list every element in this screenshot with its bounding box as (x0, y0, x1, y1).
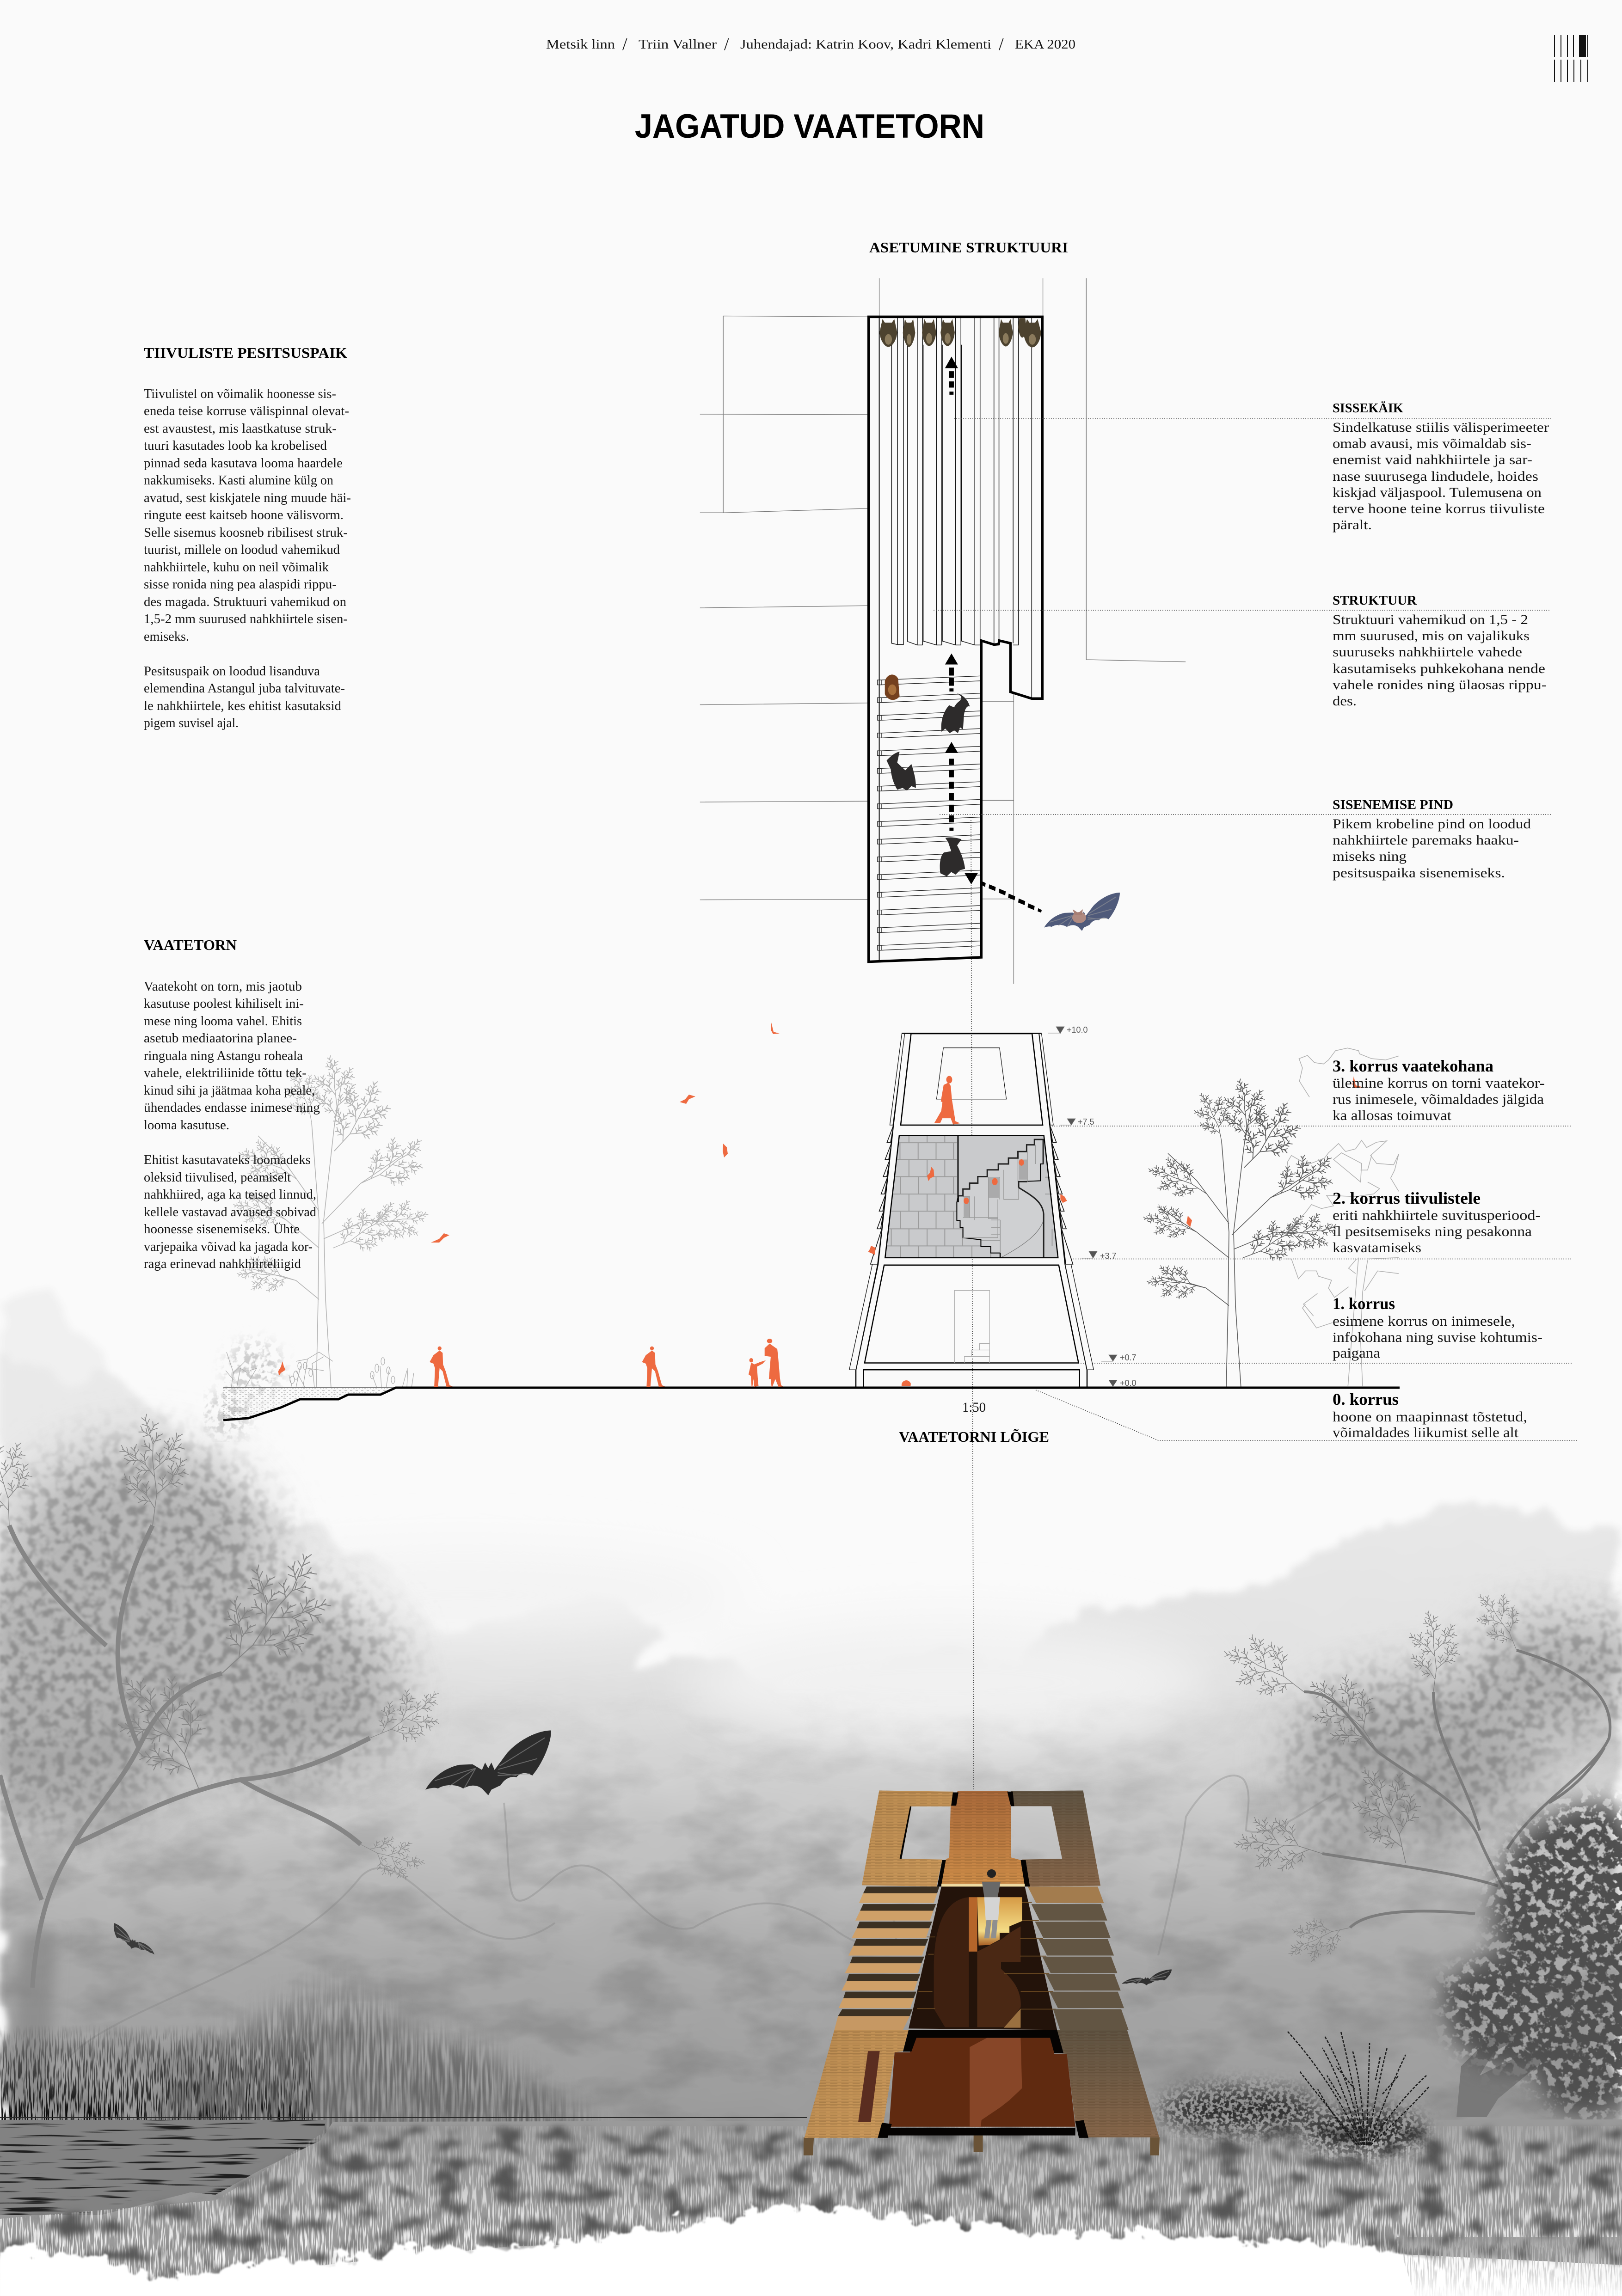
header credits: Triin Vallner (639, 37, 717, 52)
marker +7.5 (1060, 1117, 1094, 1127)
stair shadow in room (970, 2038, 1022, 2127)
heading: 2. korrus tiivulistele (1333, 1189, 1481, 1207)
orange bats (868, 1159, 1067, 1386)
right light tree (1209, 1578, 1622, 1973)
body: Ehitist kasutavateks loomadeks (144, 1153, 311, 1167)
body (144, 980, 320, 1271)
outer thick contour (869, 317, 1042, 962)
callout: floor 0 (1333, 1390, 1527, 1440)
header credits (546, 35, 1075, 54)
person 2 (642, 1347, 665, 1387)
logo barcode (1554, 35, 1588, 82)
orange figure in level 3 (934, 1076, 960, 1125)
body (1333, 1075, 1545, 1123)
body: 1,5-2 mm suurused nahkhiirtele sisen- (144, 612, 348, 626)
marker +3.7 (1081, 1251, 1117, 1261)
body: varjepaika võivad ka jagada kor- (144, 1240, 313, 1254)
adult (765, 1339, 783, 1387)
room outline (885, 1136, 1058, 1258)
people silhouettes (278, 1339, 783, 1387)
lit stairs (977, 1897, 1022, 1946)
body: kasvatamiseks (1333, 1239, 1421, 1255)
body (1333, 420, 1549, 533)
body: paigana (1333, 1345, 1380, 1361)
body: des. (1333, 693, 1357, 709)
floor slabs (917, 1903, 1056, 2009)
heading: 1. korrus (1333, 1294, 1395, 1313)
bright mist patch (185, 1553, 1207, 1743)
callout: floor 3 (1333, 1057, 1545, 1123)
body (1333, 1313, 1542, 1361)
tower section (849, 1033, 1094, 1388)
orange lit wall (969, 1897, 977, 1952)
body: raga erinevad nahkhiirteliigid (144, 1257, 301, 1271)
body: eriti nahkhiirtele suvitusperiood- (1333, 1207, 1541, 1223)
heading: SISENEMISE PIND (1333, 798, 1453, 812)
body: Struktuuri vahemikud on 1,5 - 2 (1333, 612, 1528, 627)
grey shadow foliage (203, 1343, 282, 1438)
pale grass at foot (1396, 2237, 1622, 2296)
body (1333, 1207, 1541, 1255)
heading: placement: ASETUMINE STRUKTUURI (869, 239, 1068, 256)
body: Pesitsuspaik on loodud lisanduva (144, 664, 320, 679)
scale label: 1:50 (962, 1400, 986, 1415)
body: miseks ning (1333, 849, 1407, 864)
tower 3D render (804, 1790, 1160, 2155)
body: kinud sihi ja jäätmaa koha peale, (144, 1084, 315, 1098)
hanging bats (879, 318, 1041, 347)
header credits: / (724, 35, 729, 54)
body: nahkhiirtele paremaks haaku- (1333, 833, 1519, 848)
interior column (934, 1897, 969, 2027)
central axis dotted line (971, 820, 974, 1794)
body: hoone on maapinnast tõstetud, (1333, 1408, 1527, 1425)
interior spiral mass (977, 1926, 1021, 2027)
body: päralt. (1333, 517, 1372, 533)
person on stairs (982, 1869, 1001, 1938)
level 0 space (863, 1370, 1080, 1388)
marker +3.7: +3.7 (1100, 1251, 1117, 1261)
climbing bats (887, 693, 970, 876)
marker +0.7 (1101, 1353, 1137, 1362)
horizon line (0, 2117, 807, 2118)
level markers (1048, 1025, 1137, 1388)
body: des magada. Struktuuri vahemikud on (144, 595, 346, 609)
stair thick line (958, 1139, 1044, 1258)
bat: small left (108, 1923, 160, 1956)
marker +10.0 (1048, 1025, 1088, 1035)
text block: viewing tower (144, 937, 320, 1271)
body: infokohana ning suvise kohtumis- (1333, 1329, 1542, 1345)
header credits: / (999, 35, 1004, 54)
marker +10.0: +10.0 (1067, 1025, 1088, 1035)
window (937, 1048, 1007, 1099)
leader lines (700, 278, 1186, 984)
body: ringute eest kaitseb hoone välisvorm. (144, 508, 344, 522)
upper left panel (862, 1790, 953, 1886)
dark right tree trunk (1456, 2029, 1554, 2117)
body: le nahkhiirtele, kes ehitist kasutaksid (144, 699, 341, 713)
horizontal slats (878, 676, 980, 950)
body: ka allosas toimuvat (1333, 1107, 1451, 1123)
bat: small right (1122, 1969, 1172, 1985)
slot window (858, 2051, 880, 2122)
bat: large flying (425, 1731, 551, 1795)
body: nase suurusega lindudele, hoides (1333, 469, 1538, 484)
person 1 (430, 1347, 453, 1387)
body: suuruseks nahkhiirtele vahede (1333, 644, 1522, 660)
body: kellele vastavad avaused sobivad (144, 1205, 316, 1219)
header credits: Juhendajad: Katrin Koov, Kadri Klementi (740, 37, 991, 52)
bat: blue flying towards entrance (1044, 893, 1120, 931)
door and steps (954, 1291, 989, 1363)
body: hoonesse sisenemiseks. Ühte (144, 1222, 300, 1237)
body: pinnad seda kasutava looma haardele (144, 456, 343, 471)
body: oleksid tiivulised, peamiselt (144, 1170, 291, 1185)
lower rust room (889, 2038, 1075, 2127)
marker +0.0 (1109, 1378, 1137, 1388)
left tree (0, 1412, 459, 2108)
heading: VAATETORN (144, 937, 237, 953)
body: vahele, elektriliinide tõttu tek- (144, 1066, 307, 1080)
body: eneda teise korruse välispinnal olevat- (144, 404, 349, 418)
body: mm suurused, mis on vajalikuks (1333, 628, 1530, 643)
ground mid tone (0, 2119, 1622, 2284)
level 1 room (865, 1265, 1079, 1363)
structure detail drawing (700, 278, 1186, 984)
section tree: left (227, 1054, 441, 1388)
left tree foliage (0, 1451, 398, 1826)
child (749, 1358, 766, 1387)
lower right panel (1057, 2030, 1159, 2137)
legs (804, 2136, 1160, 2155)
callout: floor 1 (1333, 1294, 1542, 1361)
ground line thick (223, 1388, 1400, 1420)
body: vahele ronides ning ülaosas rippu- (1333, 677, 1547, 692)
dark interior (909, 1886, 1057, 2030)
small orange birds (431, 1022, 1363, 1243)
callout: entrance (1333, 401, 1549, 533)
body: emiseks. (144, 630, 189, 644)
thin curve (1001, 1220, 1044, 1258)
left shingles (835, 1886, 940, 2030)
inner wall (879, 317, 880, 962)
dashed arrows (945, 357, 1042, 912)
body: elemendina Astangul juba talvituvate- (144, 681, 345, 696)
callout: structure (1333, 594, 1547, 709)
body: enemist vaid nahkhiirtele ja sar- (1333, 452, 1532, 467)
body: il pesitsemiseks ning pesakonna (1333, 1223, 1532, 1239)
callout: floor 2 (1333, 1189, 1541, 1255)
small bat (278, 1361, 285, 1376)
body: tuuri kasutades loob ka krobelised (144, 439, 327, 453)
body: kiskjad väljaspool. Tulemusena on (1333, 485, 1542, 500)
body (1333, 612, 1547, 709)
tall shrub (1288, 2032, 1429, 2145)
faint vines (55, 1776, 1336, 2080)
body: rus inimesele, võimaldades jälgida (1333, 1091, 1544, 1107)
lit floor edge (941, 1884, 1025, 1886)
heading: 3. korrus vaatekohana (1333, 1057, 1493, 1075)
plank texture (805, 1790, 1159, 2138)
upper centre panel (941, 1791, 1025, 1884)
cladding shingles (849, 1034, 1094, 1370)
body: kasutuse poolest kihiliselt ini- (144, 997, 304, 1011)
heading: STRUKTUUR (1333, 594, 1417, 608)
brown resting bat (885, 674, 900, 700)
body (144, 387, 351, 730)
faint upper mist on the left (0, 1290, 222, 1618)
body: mese ning looma vahel. Ehitis (144, 1014, 302, 1029)
stair details (963, 1145, 1036, 1258)
heading: tower section: VAATETORNI LÕIGE (899, 1428, 1049, 1445)
reeds behind the water (0, 2025, 314, 2123)
brick wall (887, 1136, 1052, 1258)
plants (226, 1352, 414, 1388)
section tree: outlined right (1285, 1048, 1399, 1386)
interior wall (957, 1136, 958, 1202)
body: ringuala ning Astangu roheala (144, 1049, 303, 1063)
mottled mist texture (0, 1687, 1622, 2126)
marker +7.5: +7.5 (1078, 1117, 1094, 1127)
grass plume (139, 1986, 601, 2237)
landscape backdrop (0, 1290, 1622, 2296)
mist ridge (0, 1348, 1622, 2173)
body: sisse ronida ning pea alaspidi rippu- (144, 577, 337, 592)
body: ülemine korrus on torni vaatekor- (1333, 1075, 1545, 1091)
body (1333, 1408, 1527, 1440)
callout: entry surface (1333, 798, 1531, 881)
body (1333, 816, 1531, 881)
header credits: EKA 2020 (1015, 37, 1075, 52)
heading: TIIVULISTE PESITSUSPAIK (144, 344, 347, 361)
soil fill (223, 1388, 396, 1420)
body: nahkhiirtele, kuhu on neil võimalik (144, 560, 329, 575)
body: Pikem krobeline pind on loodud (1333, 816, 1531, 832)
body: est avaustest, mis laastkatuse struk- (144, 422, 337, 436)
body: Vaatekoht on torn, mis jaotub (144, 980, 302, 994)
heading: 0. korrus (1333, 1390, 1399, 1408)
marker +0.7: +0.7 (1120, 1353, 1137, 1362)
low bush (1161, 2089, 1424, 2152)
body: ühendades endasse inimese ning (144, 1101, 320, 1115)
vertical ribs (891, 317, 1032, 698)
tan corner (1004, 2008, 1020, 2028)
left tree branches (0, 1412, 459, 1988)
body: Sindelkatuse stiilis välisperimeeter (1333, 420, 1549, 435)
black frame (878, 1792, 1088, 2138)
lower stair (957, 1139, 1044, 1258)
heading: SISSEKÄIK (1333, 401, 1403, 416)
upper right panel (1011, 1790, 1100, 1886)
body: Selle sisemus koosneb ribilisest struk- (144, 526, 348, 540)
body: avatud, sest kiskjatele ning muude häi- (144, 491, 351, 505)
body: tuurist, millele on loodud vahemikud (144, 543, 340, 557)
body: asetub mediaatorina planee- (144, 1031, 297, 1046)
tower walls (856, 1033, 1087, 1388)
body: kasutamiseks puhkekohana nende (1333, 661, 1545, 676)
ground dark blotches (0, 2126, 1622, 2288)
section tree: right (1137, 1078, 1351, 1388)
left tree trunk (12, 1932, 58, 2108)
dark right tree foliage (1443, 1803, 1622, 2117)
title: JAGATUD VAATETORN (635, 108, 984, 145)
white lower edge (0, 2207, 1622, 2296)
body: nakkumiseks. Kasti alumine külg on (144, 473, 333, 488)
body: terve hoone teine korrus tiivuliste (1333, 501, 1545, 516)
text block: bat nesting place (144, 344, 351, 730)
body: omab avausi, mis võimaldab sis- (1333, 436, 1531, 451)
marker +0.0: +0.0 (1120, 1378, 1137, 1388)
right tree foliage (1290, 1623, 1622, 1863)
body: pigem suvisel ajal. (144, 716, 239, 730)
body: pesitsuspaika sisenemiseks. (1333, 865, 1505, 881)
ground line thin (223, 1387, 396, 1388)
header credits: / (622, 35, 627, 54)
level 3 room (901, 1034, 1043, 1125)
water (0, 2120, 326, 2217)
header credits: Metsik linn (546, 37, 615, 52)
level 2 grey room (885, 1136, 1058, 1258)
ground vegetation and soil (203, 1343, 1400, 1438)
body: looma kasutuse. (144, 1118, 229, 1133)
ground light streaks (0, 2126, 1622, 2293)
lower left panel (805, 2030, 909, 2138)
body: Tiivulistel on võimalik hoonesse sis- (144, 387, 336, 401)
right shingles (1028, 1886, 1129, 2030)
body: nahkhiired, aga ka teised linnud, (144, 1188, 316, 1202)
body: võimaldades liikumist selle alt (1333, 1424, 1518, 1440)
dotted leader lines (934, 419, 1577, 1440)
right tree branches (1209, 1578, 1610, 1973)
body: esimene korrus on inimesele, (1333, 1313, 1515, 1329)
